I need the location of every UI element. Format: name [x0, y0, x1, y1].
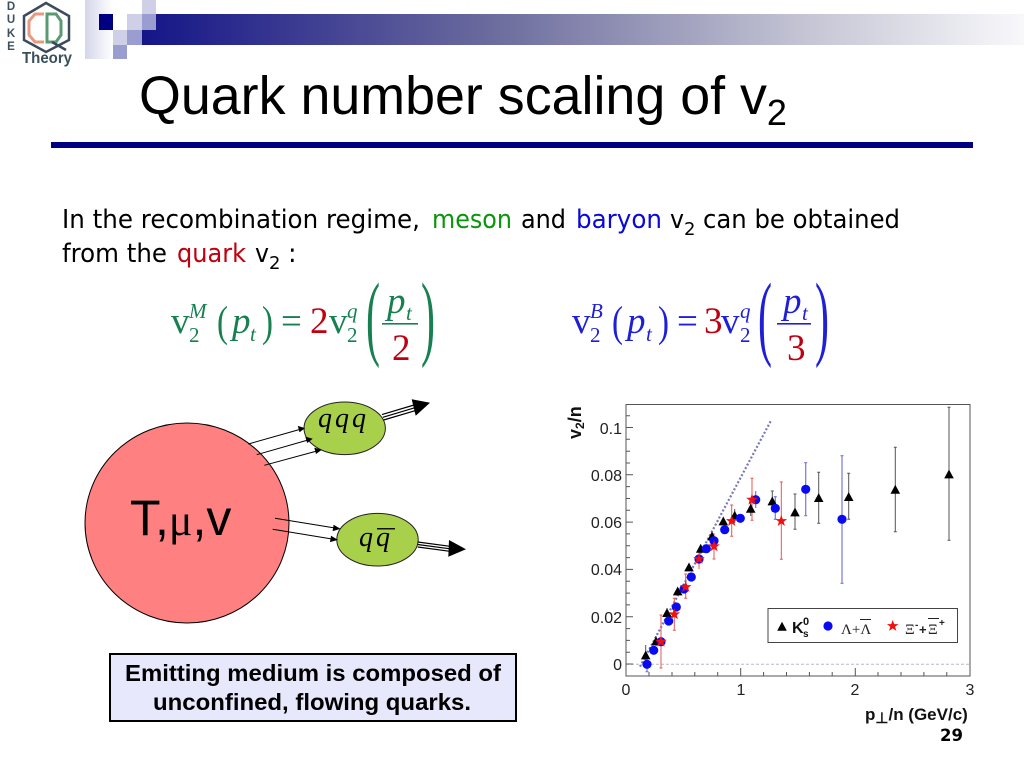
legend: s [803, 629, 809, 640]
formula: baryon: q [740, 299, 751, 323]
formula: baryon: B [590, 299, 603, 323]
title rule [51, 142, 973, 148]
formula: baryon: ( [758, 264, 772, 369]
formula: meson: t [250, 322, 257, 346]
formula: meson: M [188, 299, 208, 323]
formula: baryon: ( [612, 299, 623, 346]
callout: unconfined, flowing quarks. [153, 689, 471, 715]
formula: baryon: v [721, 301, 740, 342]
intro text [62, 205, 900, 274]
logo: Duke Theory: U [7, 14, 15, 26]
error bars: kaons [646, 407, 950, 663]
formula: baryon: = [677, 301, 698, 342]
intro text: v [255, 239, 269, 269]
legend: - [915, 620, 918, 631]
formula: meson: 2 [347, 323, 358, 347]
legend: K [792, 620, 804, 637]
formula: baryon [572, 264, 829, 369]
formula: meson: ) [262, 299, 273, 346]
y axis title: v [565, 429, 585, 439]
intro text: baryon [576, 205, 662, 235]
intro text: 2 [684, 219, 695, 240]
zero reference line [626, 663, 970, 665]
legend: Λ+Λ [841, 622, 871, 638]
x axis title: p [865, 705, 875, 724]
formula: baryon: ) [815, 264, 829, 369]
legend: Ξ [905, 622, 915, 638]
emitting medium circle [85, 423, 289, 623]
formula: meson: v [171, 301, 190, 342]
y axis title: /n [565, 406, 585, 422]
data points: xi [655, 494, 787, 647]
quark scaling dotted line [640, 420, 771, 667]
intro text: from the [62, 239, 167, 269]
logo: Duke Theory: E [7, 41, 15, 53]
callout [110, 654, 516, 721]
formula: baryon: t [646, 322, 653, 346]
formula: baryon: ) [658, 299, 669, 346]
formula: meson: ( [366, 264, 380, 369]
formula: baryon: 3 [787, 328, 806, 369]
formula: meson: ) [421, 264, 435, 369]
legend [768, 608, 958, 642]
formula: baryon: p [624, 301, 646, 342]
axes frame and ticks [626, 404, 970, 676]
chart: v2/n vs pT/n [565, 404, 975, 727]
intro text: and [521, 205, 566, 235]
legend: 0 [803, 616, 809, 628]
intro text: can be obtained [703, 205, 900, 235]
x axis tick labels: 0 [622, 682, 631, 699]
formula: meson [171, 264, 435, 369]
diagram: recombination [85, 399, 466, 623]
logo: Duke Theory [7, 1, 72, 67]
error bars: xi [660, 478, 783, 668]
logo: Duke Theory: Theory [22, 50, 72, 67]
y axis tick labels: 0.1 [600, 421, 622, 438]
formula: meson: v [329, 301, 348, 342]
logo: Duke Theory: D [7, 1, 15, 13]
callout: Emitting medium is composed of [125, 660, 501, 686]
formula: meson: 2 [392, 328, 410, 369]
formula: meson: q [347, 299, 358, 323]
formula: meson: p [384, 281, 406, 322]
y axis tick labels: 0 [613, 657, 622, 674]
formula: meson: t [406, 301, 413, 325]
formula: baryon: 3 [704, 301, 722, 342]
meson ellipse q qbar [337, 513, 418, 566]
y axis tick labels [591, 421, 622, 674]
formula: meson: 2 [189, 323, 200, 347]
header bar with squares [85, 0, 1024, 59]
logo: Duke Theory: K [7, 28, 16, 40]
formula: meson: 2 [310, 301, 328, 342]
error bars: lambda [646, 456, 844, 672]
formula: baryon: 2 [590, 323, 600, 347]
y axis tick labels: 0.04 [591, 562, 622, 579]
title: Quark number scaling of v [139, 66, 767, 126]
intro text: : [288, 239, 297, 269]
legend: Ξ [928, 622, 938, 638]
data points: lambda [642, 485, 847, 669]
formula: baryon: p [780, 281, 802, 322]
x axis tick labels: 2 [851, 682, 860, 699]
y axis tick labels: 0.06 [591, 515, 622, 532]
x axis tick labels [622, 682, 975, 699]
y axis tick labels: 0.02 [591, 610, 622, 627]
intro text: In the recombination regime, [62, 205, 420, 235]
intro text: quark [177, 239, 246, 269]
data points: kaons [641, 470, 954, 659]
incoming quark arrows [248, 427, 339, 541]
legend: + [939, 618, 945, 629]
formula: meson: = [281, 301, 302, 342]
x axis title: ⊥ [875, 710, 888, 727]
meson ellipse q qbar: qq [359, 522, 393, 553]
baryon ellipse qqq [304, 402, 385, 455]
intro text: meson [432, 205, 512, 235]
y axis tick labels: 0.08 [591, 468, 622, 485]
outgoing arrow: baryon [382, 399, 430, 420]
outgoing arrow: meson [418, 540, 466, 557]
formula: meson: p [229, 301, 250, 342]
formula: baryon: 2 [740, 323, 750, 347]
x axis tick labels: 3 [966, 682, 975, 699]
legend: + [919, 622, 927, 637]
intro text: 2 [269, 253, 280, 274]
formula: baryon: t [802, 301, 809, 325]
x axis title: /n (GeV/c) [888, 705, 968, 724]
formula: meson: ( [217, 299, 228, 346]
baryon ellipse qqq: qqq [318, 403, 369, 434]
emitting medium circle: T,μ,v [130, 490, 231, 546]
intro text: v [670, 205, 684, 235]
formula: baryon: v [572, 301, 591, 342]
slide number: 29 [940, 726, 963, 745]
title: 2 [767, 92, 787, 133]
x axis tick labels: 1 [737, 682, 746, 699]
y axis title: 2 [573, 422, 587, 429]
